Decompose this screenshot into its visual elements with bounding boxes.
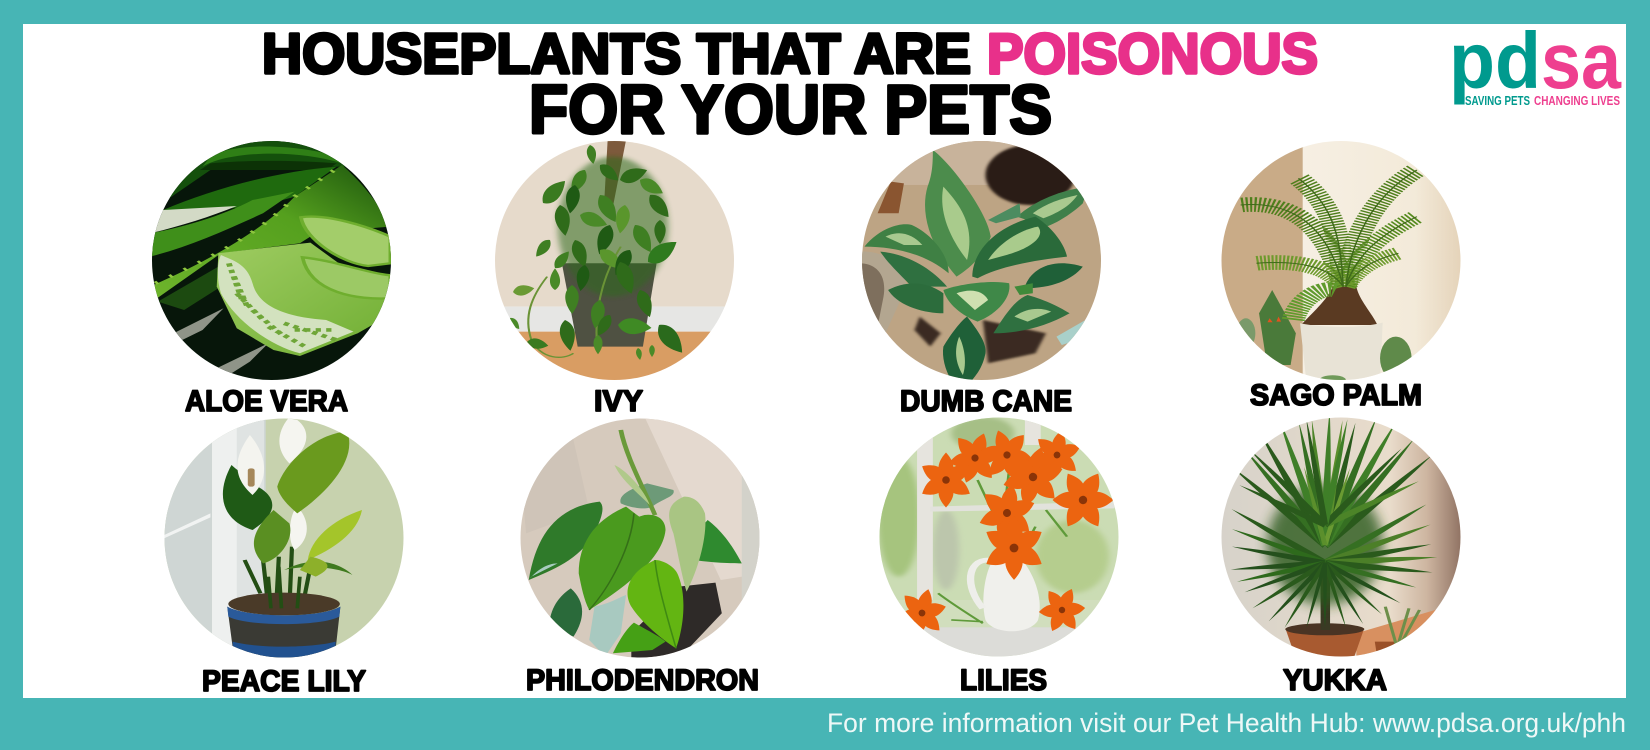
title: FOR YOUR PETS <box>529 71 1052 148</box>
photo: yukka <box>1217 410 1464 658</box>
panel: yukka <box>1217 410 1464 697</box>
logo: pdsa: SAVING PETS <box>1465 94 1530 108</box>
photo: lilies <box>875 415 1125 659</box>
label: peace lily: PEACE LILY <box>202 665 366 698</box>
logo: pdsa <box>1449 16 1621 108</box>
panel: sago palm <box>1217 138 1463 412</box>
photo: philodendron <box>516 417 763 660</box>
panel: aloe vera <box>147 138 395 418</box>
label: aloe vera: ALOE VERA <box>185 385 348 418</box>
label: yukka: YUKKA <box>1283 664 1387 697</box>
logo: pdsa: CHANGING LIVES <box>1534 94 1620 108</box>
photo: aloe vera <box>147 138 395 382</box>
label: dumb cane: DUMB CANE <box>900 385 1072 418</box>
logo: pdsa: sa <box>1541 16 1621 105</box>
photo: ivy <box>492 138 739 382</box>
label: sago palm: SAGO PALM <box>1250 379 1422 412</box>
panel: dumb cane <box>857 138 1104 418</box>
title: HOUSEPLANTS THAT ARE <box>262 22 971 86</box>
photo: peace lily <box>160 417 408 660</box>
panel: ivy <box>492 138 739 418</box>
title: POISONOUS <box>987 22 1318 86</box>
label: philodendron: PHILODENDRON <box>526 664 759 697</box>
panel: lilies <box>875 415 1125 697</box>
logo: pdsa: pd <box>1449 16 1541 105</box>
label: lilies: LILIES <box>960 664 1047 697</box>
panel: peace lily <box>160 417 408 698</box>
photo: dumb cane <box>857 138 1104 382</box>
footer link text: For more information visit our Pet Health Hub: www.pdsa.org.uk/phh <box>827 708 1626 738</box>
label: ivy: IVY <box>594 385 643 418</box>
photo: sago palm <box>1217 138 1463 385</box>
title <box>262 22 1318 148</box>
panel: philodendron <box>516 417 763 697</box>
